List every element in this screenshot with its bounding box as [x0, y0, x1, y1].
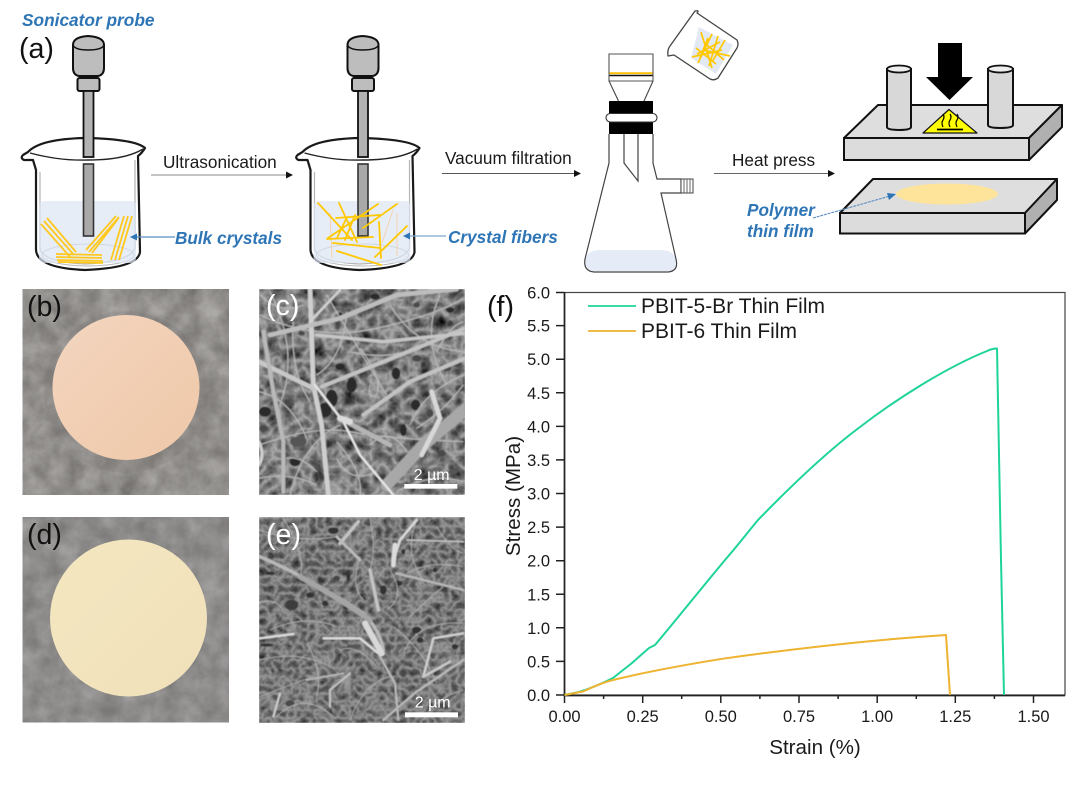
- y axis labels: [527, 284, 550, 705]
- y axis labels: 4.5: [527, 385, 550, 403]
- y axis labels: 3.5: [527, 452, 550, 470]
- press cylinder left: [887, 66, 911, 130]
- y axis labels: 0.5: [527, 653, 550, 671]
- curve: PBIT-6: [564, 635, 950, 695]
- x axis labels: 0.50: [705, 708, 737, 726]
- legend: PBIT-5-Br Thin Film: [641, 295, 825, 318]
- y axis labels: 5.5: [527, 318, 550, 336]
- legend: PBIT-6 Thin Film: [641, 320, 797, 343]
- panel label e: (e): [266, 519, 301, 551]
- chart: stress-strain: [502, 284, 1065, 759]
- label: sonicator probe: Sonicator probe: [22, 10, 155, 30]
- y axis labels: 1.5: [527, 586, 550, 604]
- x axis labels: [548, 708, 1050, 726]
- vacuum flask with funnel: [585, 54, 693, 272]
- x axis labels: 1.50: [1017, 708, 1050, 726]
- y axis labels: 3.0: [527, 486, 550, 504]
- photo (d): PBIT-6 film on grey paper: (d): [27, 519, 62, 551]
- arrow: ultrasonication: Ultrasonication: [163, 152, 277, 172]
- scale bar e: 2 µm: [415, 694, 451, 711]
- photo (b): PBIT-5-Br film on grey paper: (b): [27, 291, 62, 323]
- heat press top plate: [844, 43, 1062, 160]
- arrow: heat press: [714, 150, 835, 177]
- icon: down arrow: [926, 43, 973, 100]
- y axis labels: 1.0: [527, 620, 550, 638]
- curve: PBIT-5-Br: [564, 348, 1004, 695]
- x axis labels: 1.25: [939, 708, 971, 726]
- scale bar e: [405, 694, 458, 717]
- y axis labels: 6.0: [527, 284, 550, 302]
- y axis labels: 0.0: [527, 687, 550, 705]
- panel: schematic (a): [19, 10, 1062, 272]
- heat press bottom plate with film: [840, 179, 1057, 234]
- label: polymer thin film with pointer: Polymer: [747, 200, 816, 220]
- arrow: heat press: Heat press: [732, 150, 815, 170]
- beaker with crystal fibers: [296, 36, 420, 270]
- scale bar c: 2 µm: [414, 467, 450, 484]
- x axis labels: 1.00: [861, 708, 893, 726]
- axis title: stress: Stress (MPa): [502, 436, 525, 556]
- x axis labels: 0.00: [548, 708, 581, 726]
- panel label a: (a): [19, 33, 54, 65]
- photo (d): PBIT-6 film on grey paper: [22, 517, 229, 722]
- icon: hot surface warning: [923, 110, 977, 133]
- x axis labels: 0.25: [627, 708, 659, 726]
- press cylinder right: [988, 66, 1013, 128]
- polymer film ellipse: [896, 184, 998, 204]
- legend: [588, 295, 825, 343]
- y axis labels: 4.0: [527, 418, 550, 436]
- tilted beaker pouring fibers: [668, 11, 738, 80]
- photo (b): PBIT-5-Br film on grey paper: [22, 289, 229, 495]
- y axis labels: 2.5: [527, 519, 550, 537]
- SEM image (c): [259, 289, 467, 495]
- panel label f: (f): [487, 291, 514, 323]
- beaker with bulk crystals: [22, 36, 145, 270]
- label: polymer thin film with pointer: thin film: [747, 221, 814, 241]
- y axis ticks: [556, 292, 564, 695]
- x axis labels: 0.75: [783, 708, 815, 726]
- arrow: vacuum filtration: [442, 148, 581, 177]
- axis title: strain: Strain (%): [769, 736, 861, 759]
- label: bulk crystals with pointer: Bulk crystals: [175, 228, 282, 248]
- arrow: vacuum filtration: Vacuum filtration: [445, 148, 572, 168]
- label: polymer thin film with pointer: [747, 193, 896, 241]
- x axis ticks: [564, 695, 1034, 703]
- y axis labels: 2.0: [527, 553, 550, 571]
- y axis labels: 5.0: [527, 351, 550, 369]
- panel label c: (c): [266, 290, 299, 322]
- scale bar c: [404, 467, 457, 489]
- SEM image (e): [259, 517, 465, 723]
- label: crystal fibers with pointer: Crystal fibers: [448, 227, 558, 247]
- arrow: ultrasonication: [151, 152, 293, 178]
